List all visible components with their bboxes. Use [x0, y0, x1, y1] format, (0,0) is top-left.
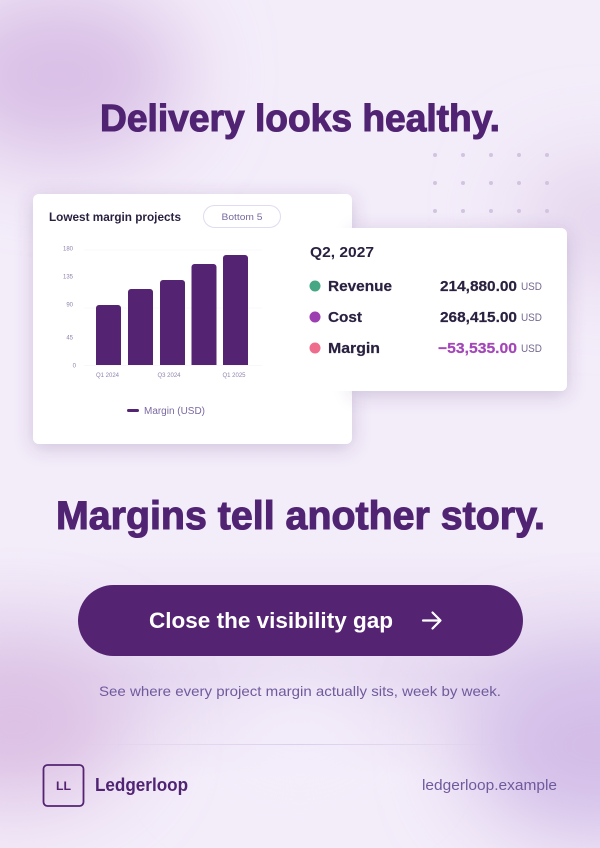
brand name: Ledgerloop: [95, 775, 188, 795]
row: revenue: 214,880.00: [440, 279, 517, 295]
row: cost: Cost: [328, 310, 362, 326]
title: Delivery looks healthy: Delivery looks healthy.: [100, 98, 500, 140]
bar chart: Q3 2024: [157, 373, 181, 379]
bar chart: 0: [73, 364, 77, 370]
row: revenue: Revenue: [328, 279, 392, 295]
filter pill: Bottom 5: [204, 206, 280, 228]
bar chart: [63, 246, 262, 379]
brand logo: [44, 765, 188, 806]
icon: LL monogram: LL: [56, 779, 71, 793]
row: cost: 268,415.00: [440, 310, 517, 326]
icon: arrow: [423, 612, 440, 628]
heading: Margins tell another story: Margins tell another story.: [56, 494, 545, 538]
row: margin: [310, 341, 542, 357]
row: margin: −53,535.00: [438, 341, 517, 357]
row: revenue: [310, 279, 542, 295]
row: margin: USD: [521, 343, 542, 355]
row: cost: [310, 310, 542, 326]
row: margin: Margin: [328, 341, 380, 357]
row: cost: USD: [521, 312, 542, 324]
icon: LL monogram: [44, 765, 84, 806]
supporting text: See where every project margin actually sits, week by week.: [99, 683, 501, 699]
card heading: Lowest margin projects: [49, 212, 181, 224]
website url: ledgerloop.example: [422, 777, 557, 794]
bar chart: 90: [66, 302, 74, 308]
panel: Q2 2027 summary card: [296, 228, 567, 391]
filter pill: Bottom 5: Bottom 5: [222, 212, 262, 223]
bar chart: 180: [63, 246, 74, 252]
bar chart: 45: [66, 336, 74, 342]
row: revenue: USD: [521, 281, 542, 293]
decorative dot grid: [433, 153, 549, 213]
card heading: Q2, 2027: [310, 244, 374, 261]
chart legend: Margin (USD): [144, 406, 205, 417]
bar chart: 135: [63, 274, 74, 280]
bar chart: Q1 2024: [96, 373, 120, 379]
bar chart: Q1 2025: [222, 373, 246, 379]
panel: lowest margin projects chart card: [33, 194, 352, 444]
call to action button: [78, 585, 523, 656]
call to action button: Close the visibility gap: [149, 608, 393, 633]
